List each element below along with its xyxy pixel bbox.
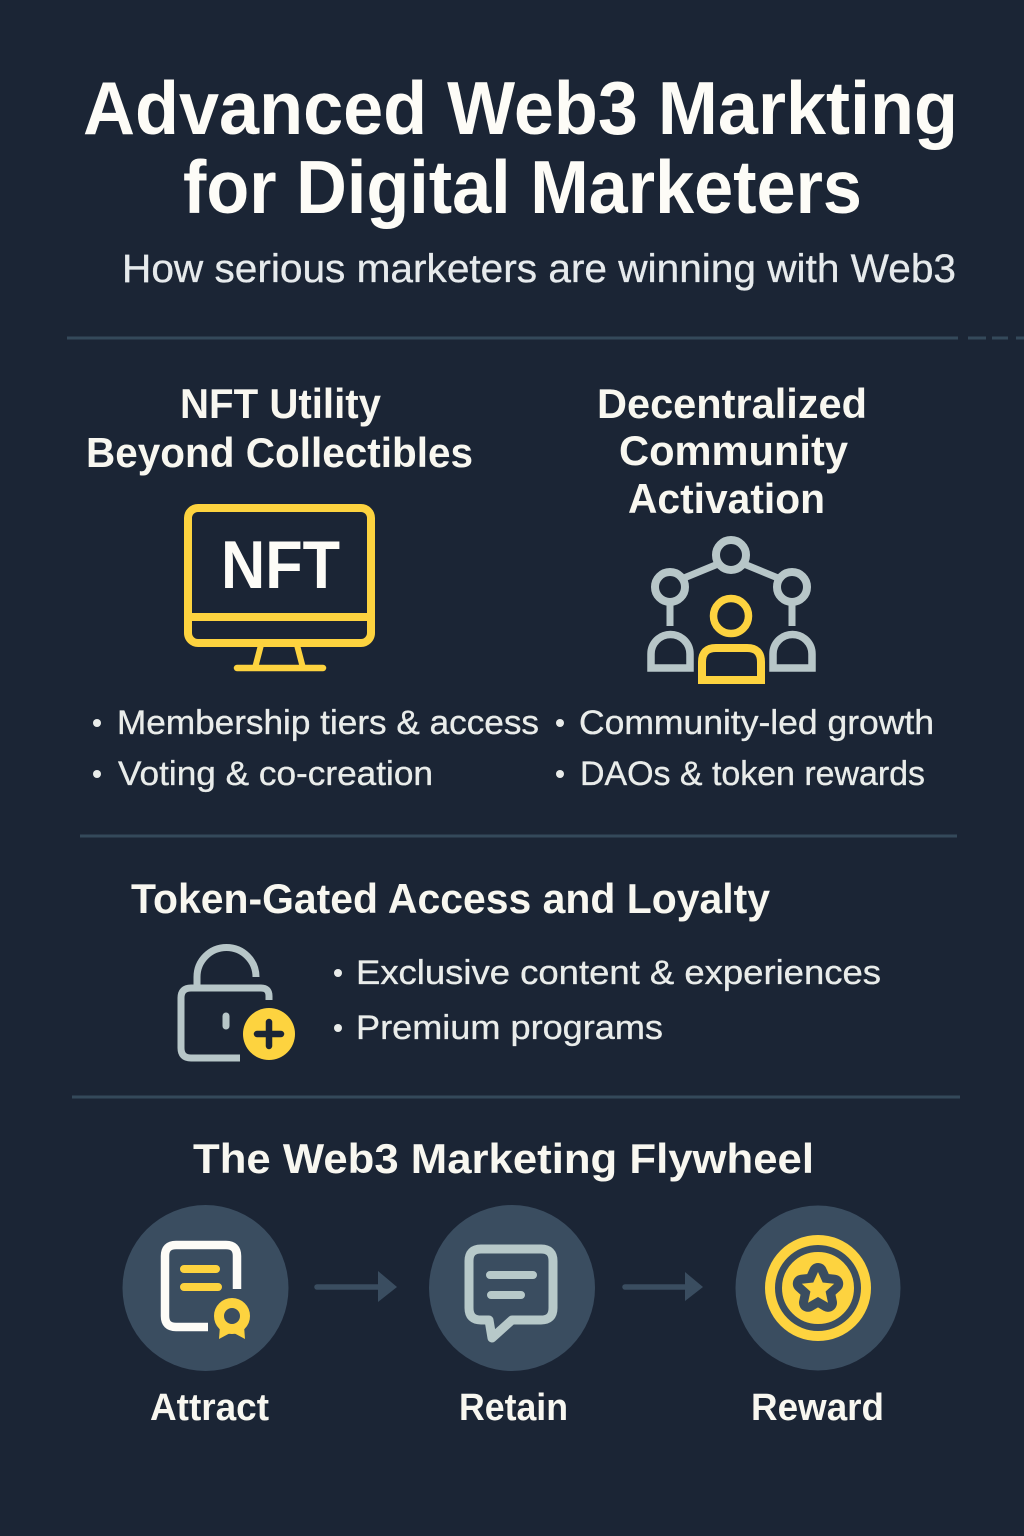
step: retain — [429, 1205, 595, 1429]
heading: decentralized community activation: Community — [619, 427, 849, 474]
panel: decentralized community — [556, 380, 934, 793]
heading: NFT utility: NFT Utility — [180, 380, 382, 427]
bullet list: token-gated access: Premium programs — [356, 1009, 663, 1047]
bullet list: NFT utility: Voting & co-creation — [118, 755, 433, 793]
icon: NFT monitor: NFT — [221, 527, 340, 603]
panel: token-gated access — [131, 875, 881, 1060]
bullet list: NFT utility — [93, 704, 539, 793]
bullet list: community — [556, 704, 934, 793]
bullet list: token-gated access: Exclusive content & experiences — [356, 954, 881, 992]
bullet list: NFT utility: Membership tiers & access — [117, 704, 539, 742]
step: reward — [736, 1206, 900, 1429]
arrow: retain to reward — [625, 1272, 703, 1301]
subtitle: How serious marketers are winning with Web3 — [122, 247, 956, 291]
step: attract — [122, 1205, 288, 1429]
icon: chat bubble — [469, 1249, 553, 1338]
heading: decentralized community activation: Activation — [628, 475, 825, 522]
title — [83, 66, 958, 229]
heading: decentralized community activation — [597, 380, 867, 522]
title: for Digital Marketers — [183, 145, 862, 229]
heading: token-gated access: Token-Gated Access and Loyalty — [131, 875, 771, 922]
step: reward: Reward — [751, 1387, 884, 1429]
icon: NFT monitor — [188, 508, 371, 668]
title: Advanced Web3 Markting — [83, 66, 958, 150]
step: retain: Retain — [459, 1387, 568, 1429]
panel: NFT utility — [86, 380, 539, 793]
icon: document with rosette — [165, 1245, 245, 1339]
arrow: attract to retain — [317, 1271, 397, 1302]
bullet list: token-gated access — [334, 954, 881, 1047]
icon: padlock with plus — [181, 948, 295, 1060]
step: attract: Attract — [150, 1387, 269, 1429]
heading: flywheel: The Web3 Marketing Flywheel — [193, 1135, 814, 1182]
icon: community network — [651, 540, 812, 680]
heading: decentralized community activation: Decentralized — [597, 380, 867, 427]
heading: NFT utility: Beyond Collectibles — [86, 429, 473, 476]
bullet list: community: DAOs & token rewards — [580, 755, 925, 793]
panel: flywheel — [122, 1135, 900, 1429]
icon: star coin — [765, 1235, 871, 1341]
bullet list: community: Community-led growth — [579, 704, 934, 742]
heading: NFT utility — [86, 380, 473, 476]
